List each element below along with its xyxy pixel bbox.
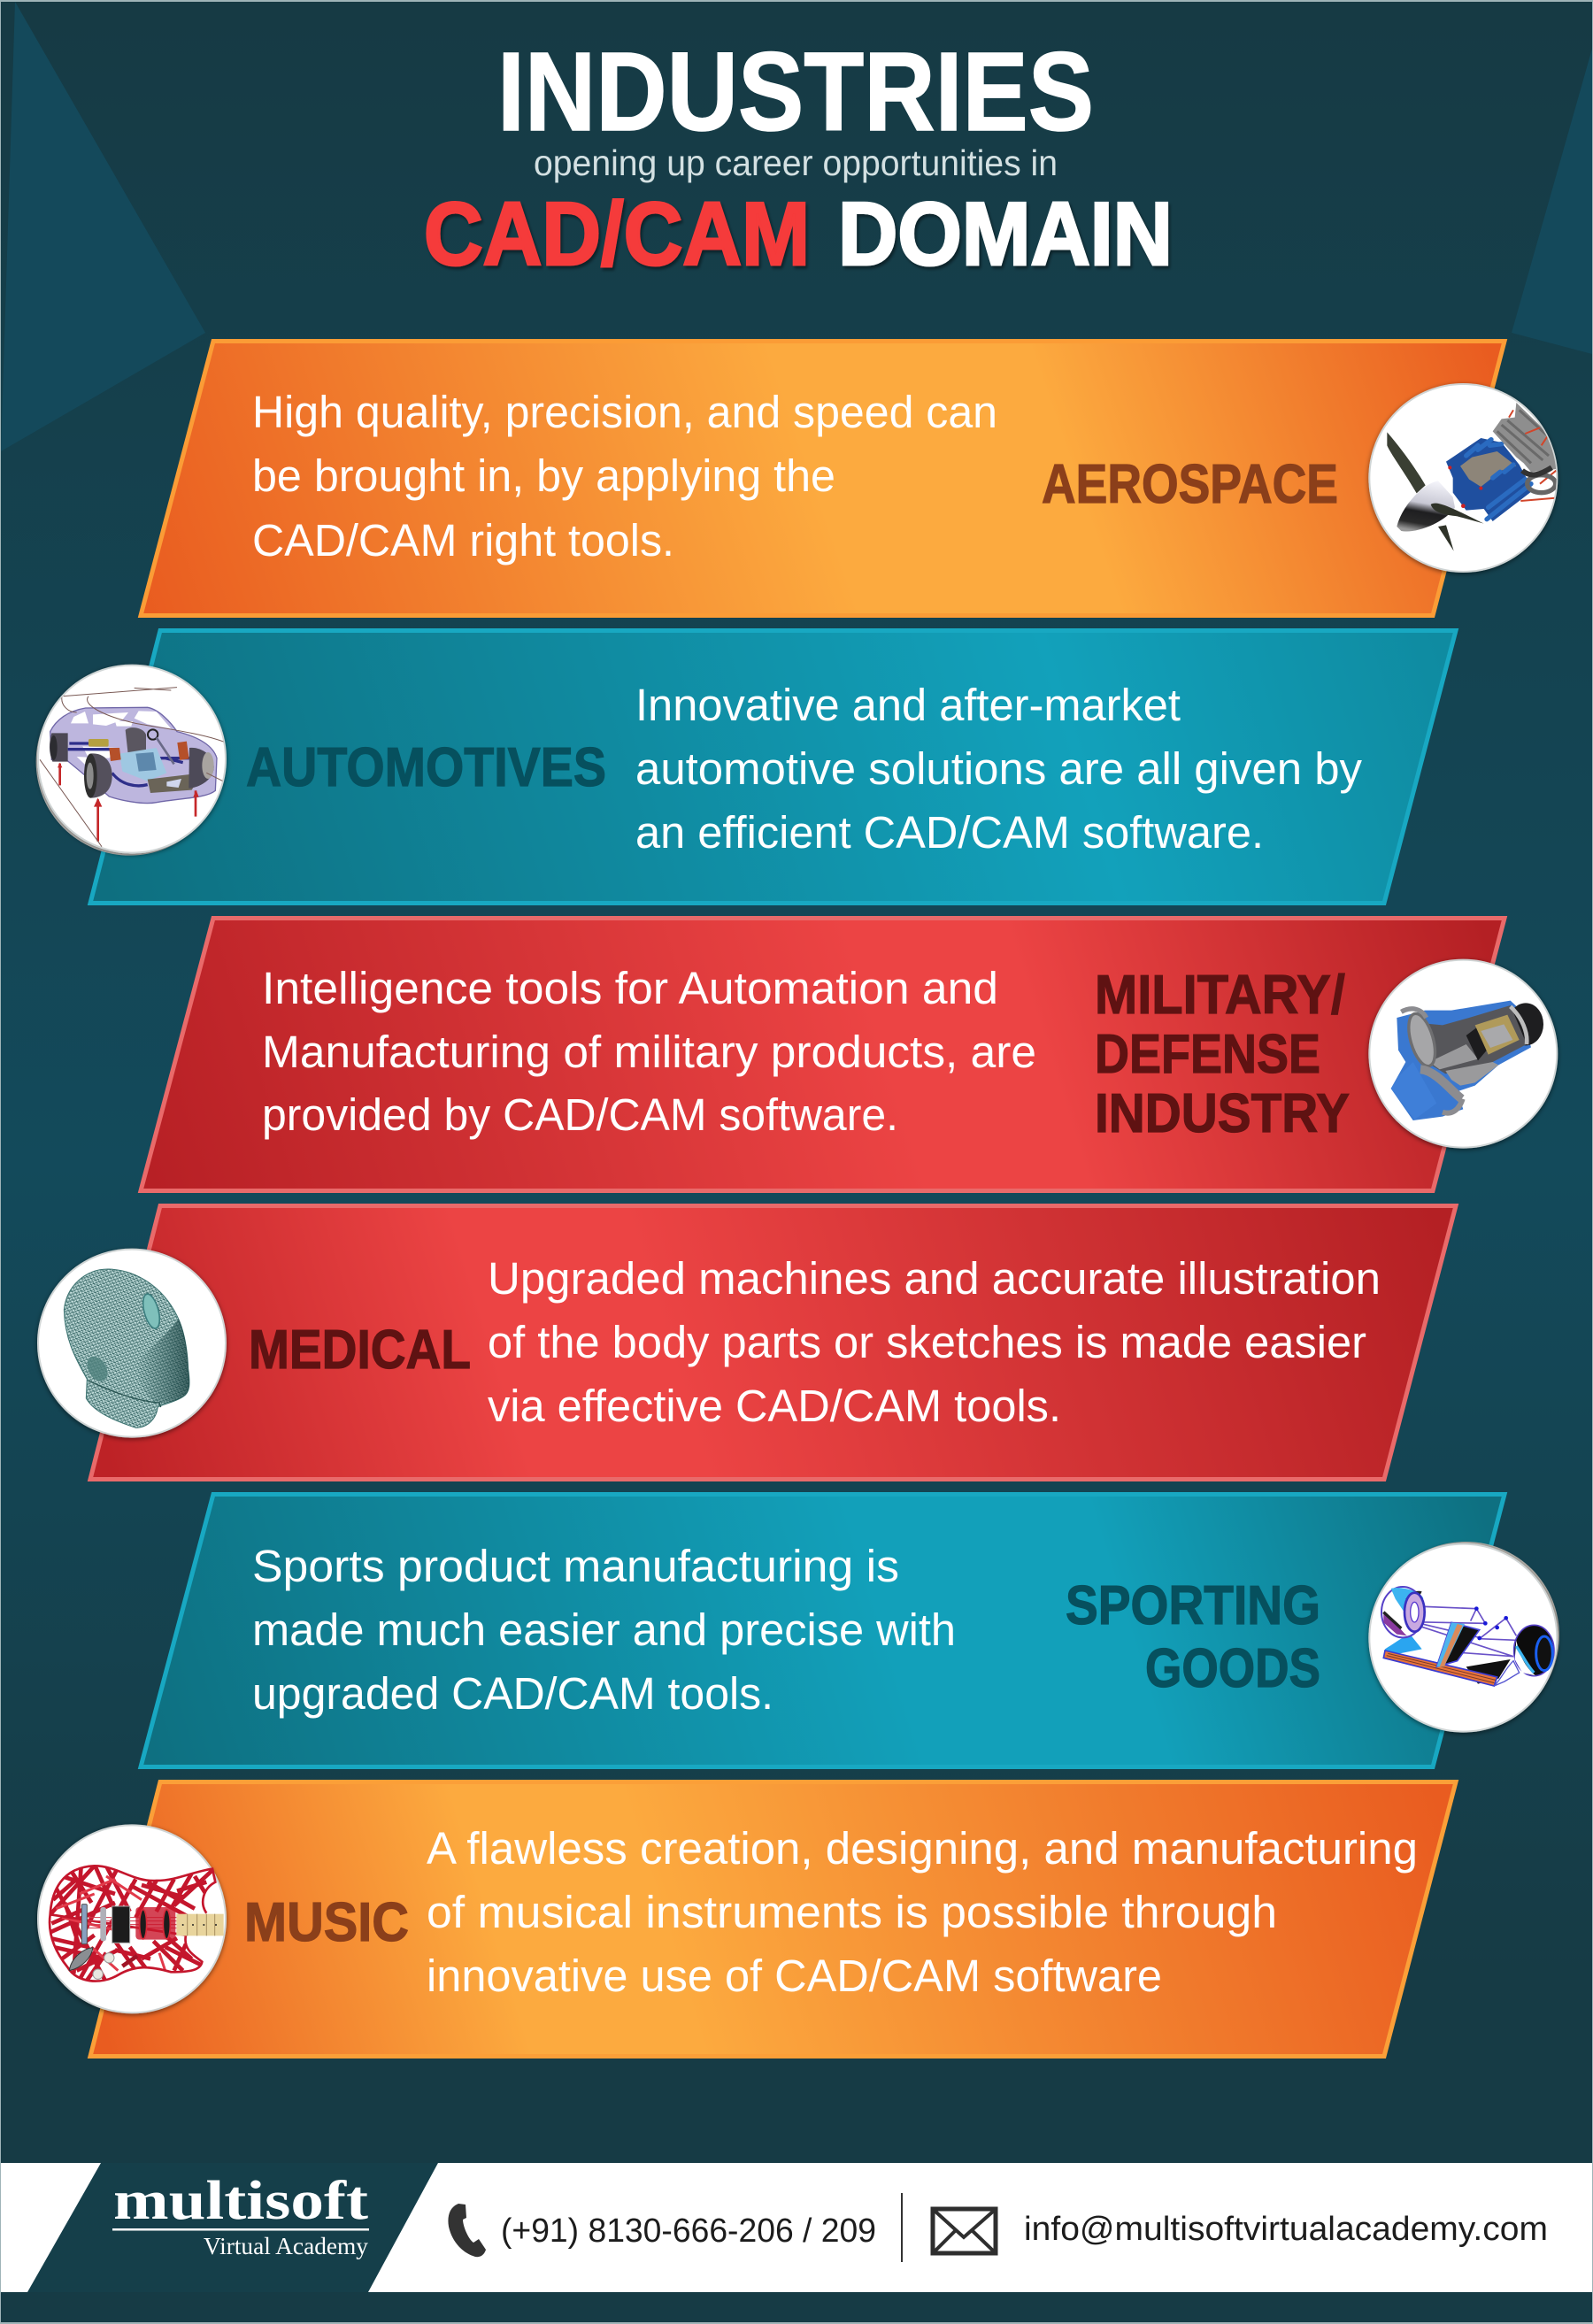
icon: wireframe head: [38, 1250, 226, 1437]
icon: envelope: [933, 2209, 996, 2253]
description text: provided by CAD/CAM software.: [262, 1089, 898, 1140]
heading: cad/cam domain: [424, 185, 1173, 284]
panel: sporting goods: [141, 1494, 1504, 1766]
footer: [1, 2163, 1592, 2292]
description text: innovative use of CAD/CAM software: [427, 1951, 1162, 2001]
description text: automotive solutions are all given by: [635, 743, 1362, 794]
logo: multisoft: [113, 2171, 368, 2231]
description text: of musical instruments is possible through: [427, 1887, 1277, 1937]
label: military/defense industry: INDUSTRY: [1095, 1083, 1350, 1144]
panel: music: [90, 1782, 1456, 2057]
panel: aerospace: [141, 342, 1504, 616]
email: info@multisoftvirtualacademy.com: [1024, 2211, 1548, 2248]
logo: Virtual Academy: [204, 2233, 368, 2259]
panel: military / defense industry: [141, 919, 1504, 1191]
label: sporting goods: SPORTING: [1066, 1575, 1320, 1636]
icon: aircraft engine: [1369, 384, 1558, 572]
subheading: opening up career opportunities in: [534, 142, 1058, 183]
title: [424, 29, 1173, 284]
icon: electric guitar: [38, 1825, 226, 2012]
heading: cad/cam domain: CAD/CAM: [424, 185, 810, 284]
description text: of the body parts or sketches is made easier: [488, 1317, 1366, 1367]
description text: Innovative and after-market: [635, 680, 1181, 730]
description text: Intelligence tools for Automation and: [262, 963, 998, 1013]
icon: car cutaway: [36, 666, 226, 856]
description text: [262, 963, 1036, 1140]
label: aerospace: AEROSPACE: [1042, 454, 1338, 515]
description text: Sports product manufacturing is: [252, 1541, 899, 1591]
description text: [635, 680, 1362, 858]
description text: [427, 1823, 1418, 2001]
description text: CAD/CAM right tools.: [252, 515, 674, 566]
icon: phone: [448, 2204, 486, 2257]
label: military/defense industry: MILITARY/: [1095, 965, 1345, 1026]
icon: race car wireframe: [1369, 1542, 1559, 1732]
description text: A flawless creation, designing, and manufacturing: [427, 1823, 1418, 1874]
panel: automotives: [90, 630, 1456, 903]
label: military/defense industry: [1095, 965, 1350, 1144]
heading: industries: INDUSTRIES: [497, 29, 1094, 154]
label: sporting goods: [1066, 1575, 1320, 1699]
heading: cad/cam domain: DOMAIN: [838, 185, 1173, 284]
panel: medical: [90, 1205, 1456, 1480]
icon: gearbox cutaway: [1369, 960, 1557, 1148]
label: sporting goods: GOODS: [1145, 1638, 1320, 1699]
label: automotives: AUTOMOTIVES: [246, 737, 606, 798]
label: military/defense industry: DEFENSE: [1095, 1024, 1320, 1085]
description text: via effective CAD/CAM tools.: [488, 1381, 1061, 1431]
description text: [488, 1253, 1381, 1431]
description text: upgraded CAD/CAM tools.: [252, 1668, 773, 1719]
description text: be brought in, by applying the: [252, 450, 835, 501]
description text: [252, 387, 997, 566]
label: music: MUSIC: [244, 1892, 409, 1953]
description text: Upgraded machines and accurate illustration: [488, 1253, 1381, 1304]
description text: an efficient CAD/CAM software.: [635, 807, 1264, 858]
description text: High quality, precision, and speed can: [252, 387, 997, 437]
phone number: (+91) 8130-666-206 / 209: [501, 2212, 876, 2250]
description text: made much easier and precise with: [252, 1604, 956, 1655]
description text: Manufacturing of military products, are: [262, 1027, 1036, 1077]
description text: [252, 1541, 956, 1719]
logo: [27, 2163, 438, 2292]
label: medical: MEDICAL: [249, 1320, 471, 1381]
